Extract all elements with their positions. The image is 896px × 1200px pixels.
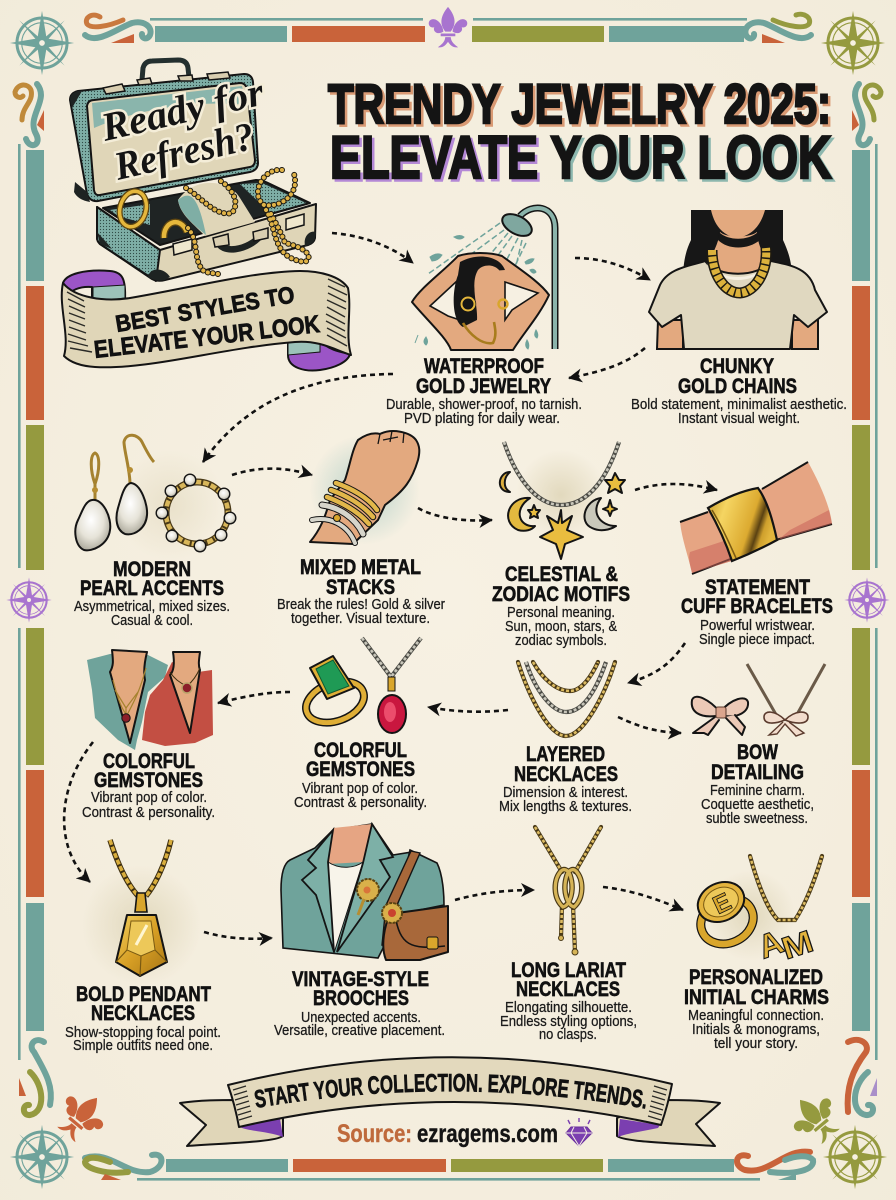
description: Initials & monograms, <box>692 1021 820 1038</box>
lid corners and hinges <box>70 91 90 202</box>
bag <box>383 906 448 960</box>
heading: MODERN <box>113 558 191 581</box>
red garment skin <box>170 652 200 733</box>
heading <box>681 576 833 618</box>
heading: MIXED METAL <box>300 556 421 579</box>
illustration: arm with cuff <box>680 462 832 574</box>
right purple roll <box>288 340 350 370</box>
suitcase corners <box>97 232 316 281</box>
arms <box>657 320 818 349</box>
scroll: top left vertical <box>15 84 44 145</box>
arm openings <box>430 280 538 320</box>
pendant <box>116 915 167 976</box>
scroll: bottom left horizontal <box>85 1155 162 1180</box>
spray lines <box>428 223 526 274</box>
description: Mix lengths & textures. <box>499 798 632 815</box>
arrow: waterproof to chunky <box>575 258 650 280</box>
description: Elongating silhouette. <box>505 999 632 1016</box>
shower pipe and head <box>520 208 555 349</box>
illustration: open suitcase <box>70 60 316 281</box>
item: long lariat necklaces <box>500 827 637 1043</box>
description <box>701 782 814 827</box>
icon: fleur-de-lis bottom left <box>49 1083 114 1149</box>
description <box>82 789 215 821</box>
far shoulder <box>395 850 444 915</box>
skin <box>328 824 372 864</box>
item: colorful gemstones worn <box>82 650 215 821</box>
illustration: two women with gem necklaces <box>87 650 213 750</box>
arrows: flow between trends <box>64 233 717 939</box>
heading <box>80 558 224 600</box>
item: waterproof gold jewelry <box>386 208 582 427</box>
teal garment <box>87 652 168 750</box>
description: Versatile, creative placement. <box>274 1022 445 1039</box>
left border rule and bars <box>18 144 44 1060</box>
script text: Ready for Refresh? <box>96 69 268 189</box>
arrow: layered to gemstones <box>428 707 508 712</box>
arrow: brooch to lariat <box>455 890 534 900</box>
teal garment necklaces <box>113 668 146 715</box>
right border rule and bars <box>852 144 878 1060</box>
chunky chain <box>712 248 766 293</box>
hair <box>454 256 505 327</box>
item: mixed metal stacks <box>277 431 445 627</box>
glow <box>115 450 225 560</box>
illustration: t-shirt with chain <box>649 210 827 349</box>
description <box>631 396 847 427</box>
description: Endless styling options, <box>500 1013 637 1030</box>
description <box>277 596 445 627</box>
icon: compass bottom right <box>823 1125 887 1189</box>
red garment pendant <box>170 668 200 686</box>
item: chunky gold chains <box>631 210 847 427</box>
lid teal shading <box>92 86 246 128</box>
heading: COLORFUL <box>103 750 195 773</box>
heading <box>511 959 626 1001</box>
description: Durable, shower-proof, no tarnish. <box>386 396 582 413</box>
heading <box>300 556 421 599</box>
heading <box>711 741 804 784</box>
arrow: waterproof to pearl <box>203 374 393 462</box>
icon: compass left middle <box>6 577 52 623</box>
heading <box>306 739 415 781</box>
description: Instant visual weight. <box>678 410 800 427</box>
top border rule and bars <box>150 18 747 42</box>
heading: BOW <box>737 741 778 764</box>
description: Meaningful connection. <box>688 1007 824 1024</box>
script text: Ready for Refresh?: Ready for <box>96 69 268 150</box>
illustration: emerald ring and ruby pendant <box>300 638 421 733</box>
initial M: M <box>777 923 817 966</box>
illustration: gold pendant <box>82 840 202 985</box>
title <box>328 72 834 194</box>
scroll: top left horizontal <box>85 15 151 43</box>
arrow: celestial to cuff <box>635 484 717 490</box>
illustration: pearl earrings and bracelet <box>75 435 236 560</box>
hair <box>683 210 792 280</box>
big star <box>540 510 583 559</box>
left purple roll <box>63 271 125 300</box>
description: Bold statement, minimalist aesthetic. <box>631 396 847 413</box>
glow <box>310 435 420 545</box>
small bow <box>764 712 808 723</box>
item: personalized initial charms <box>684 856 829 1052</box>
description <box>500 999 637 1043</box>
face and neck <box>474 266 503 326</box>
heading: CUFF BRACELETS <box>681 595 833 618</box>
teal garment skin <box>110 650 147 743</box>
ribbon left tail <box>180 1100 283 1146</box>
heading <box>416 355 551 398</box>
illustration: signet ring and initial necklace <box>691 856 822 966</box>
description: together. Visual texture. <box>291 610 430 627</box>
heading: WATERPROOF <box>424 355 544 378</box>
description: Coquette aesthetic, <box>701 796 814 813</box>
emerald <box>310 656 354 699</box>
ribbon banner: call to action <box>179 1056 721 1147</box>
description: Single piece impact. <box>699 631 815 648</box>
source label: Source: <box>337 1120 412 1148</box>
item: modern pearl accents <box>74 435 236 629</box>
heading: STACKS <box>326 576 395 599</box>
ribbon body <box>62 271 351 367</box>
heading: PERSONALIZED <box>689 966 823 989</box>
heading <box>492 563 630 606</box>
icon: fleur-de-lis top <box>429 7 467 47</box>
shirt <box>649 261 827 349</box>
arrow: pendant to brooch <box>204 932 272 939</box>
icon: fleur-de-lis bottom right <box>783 1085 848 1151</box>
description: Sun, moon, stars, & <box>505 618 617 635</box>
signet letter E: E <box>709 887 736 920</box>
heading: GEMSTONES <box>306 758 415 781</box>
arrow: suitcase to waterproof <box>332 233 413 263</box>
ribbon text: START YOUR COLLECTION. EXPLORE TRENDS. <box>254 1074 646 1109</box>
title line 2 ELEVATE: ELEVATE <box>330 124 538 191</box>
water drops <box>415 236 538 349</box>
suitcase handle <box>142 60 189 80</box>
description: Show-stopping focal point. <box>65 1024 221 1041</box>
description: Vibrant pop of color. <box>91 789 207 806</box>
illustration: blazer with brooches and bag <box>281 824 448 960</box>
gold rings <box>116 188 150 230</box>
ribbon hatching <box>233 1086 667 1120</box>
description: PVD plating for daily wear. <box>404 410 560 427</box>
item: bold pendant necklaces <box>65 840 221 1054</box>
blazer <box>281 824 412 958</box>
scroll: top right vertical <box>852 84 881 145</box>
body and arms <box>412 253 549 350</box>
title line 2 shadow ELEVATE: ELEVATE <box>332 126 540 194</box>
script text: Ready for Refresh?: Refresh? <box>109 113 258 189</box>
description <box>65 1024 221 1054</box>
icon: compass bottom left <box>10 1125 74 1189</box>
necklace <box>463 322 495 343</box>
large bow <box>692 697 748 716</box>
ribbon text line 1: BEST STYLES TO <box>114 281 296 337</box>
arrow: chunky to waterproof caption <box>569 348 645 378</box>
description: zodiac symbols. <box>515 632 607 649</box>
description <box>688 1007 824 1052</box>
description: Personal meaning. <box>507 604 615 621</box>
ribbon body <box>228 1057 672 1127</box>
arrow: layered to bow <box>618 717 681 733</box>
heading: BOLD PENDANT <box>76 983 211 1006</box>
scroll: bottom right horizontal <box>737 1152 813 1180</box>
suitcase front handle and clasps <box>218 234 262 249</box>
arrow: lariat to initial charms <box>603 887 683 910</box>
arm <box>680 462 832 573</box>
cuff <box>708 488 777 561</box>
icon: compass top left <box>10 11 74 75</box>
bangles <box>312 483 377 543</box>
heading: DETAILING <box>711 761 804 784</box>
ribbon right tail <box>617 1100 720 1146</box>
item: statement cuff bracelets <box>680 462 833 648</box>
icon: compass right middle <box>844 577 890 623</box>
description <box>274 1009 445 1039</box>
brooch on bag <box>382 903 402 923</box>
illustration: shower <box>412 208 555 350</box>
heading: LAYERED <box>526 743 605 766</box>
arrow: mixed metal to celestial <box>418 508 492 520</box>
heading: STATEMENT <box>705 576 810 599</box>
hand and arm <box>310 431 419 544</box>
item: bow detailing <box>692 664 825 827</box>
ribbon banner: best styles <box>62 271 351 370</box>
large gold moon <box>508 498 535 531</box>
heading <box>94 750 203 792</box>
scroll: bottom left vertical <box>19 1040 51 1115</box>
heading: PEARL ACCENTS <box>80 577 224 600</box>
heading <box>684 966 829 1009</box>
illustration: bows <box>692 664 825 736</box>
illustration: wrist with bangles <box>310 431 420 545</box>
neck and chin <box>711 210 765 238</box>
earrings <box>462 298 474 310</box>
source url: ezragems.com <box>417 1120 558 1148</box>
description: Feminine charm. <box>710 782 805 799</box>
necklace chain <box>750 856 822 920</box>
illustration: celestial necklace <box>500 442 625 559</box>
pearl bracelet <box>166 482 228 544</box>
red garment <box>142 662 213 746</box>
description: Contrast & personality. <box>294 794 427 811</box>
suitcase interior <box>103 180 310 245</box>
description <box>74 598 230 629</box>
heading: GOLD JEWELRY <box>416 375 551 398</box>
description <box>499 784 632 815</box>
item: vintage-style brooches <box>274 824 448 1039</box>
left lapel <box>302 830 334 952</box>
pendant bail <box>388 677 395 691</box>
description: Contrast & personality. <box>82 804 215 821</box>
heading <box>678 355 797 398</box>
arrow: gemstones to gemstone wearers <box>218 692 290 703</box>
small stars <box>528 473 625 518</box>
ring band <box>300 674 370 730</box>
ring band <box>693 890 761 952</box>
arrow: pearl to mixed metal <box>232 469 312 475</box>
description: Dimension & interest. <box>503 784 628 801</box>
heading <box>514 743 618 786</box>
heading: NECKLACES <box>514 763 618 786</box>
gold chains <box>186 180 235 214</box>
glow <box>82 865 202 985</box>
illustration: three chains <box>518 662 615 736</box>
initial A: A <box>753 923 788 966</box>
bag strap <box>382 851 420 945</box>
bottom border rule and bars <box>137 1159 760 1181</box>
heading: BROOCHES <box>313 987 409 1010</box>
item: layered necklaces <box>499 662 632 815</box>
suitcase lid <box>70 74 258 201</box>
right lapel <box>337 824 393 952</box>
description: Powerful wristwear. <box>700 617 815 634</box>
heading: INITIAL CHARMS <box>684 986 829 1009</box>
suitcase base <box>97 204 316 281</box>
heading: GEMSTONES <box>94 769 203 792</box>
description: Asymmetrical, mixed sizes. <box>74 598 230 615</box>
icon: diamond <box>566 1118 592 1146</box>
heading: NECKLACES <box>516 978 620 1001</box>
earring 1 <box>91 453 99 500</box>
pendant chain <box>362 638 421 677</box>
glow <box>705 870 795 960</box>
small moon <box>500 472 510 492</box>
description: subtle sweetness. <box>706 810 808 827</box>
glow <box>516 450 606 540</box>
ribbon text line 2: ELEVATE YOUR LOOK <box>93 311 321 364</box>
heading: NECKLACES <box>91 1002 195 1025</box>
chain <box>110 840 171 896</box>
source line <box>337 1118 592 1148</box>
heading <box>292 968 429 1010</box>
white tee <box>328 862 363 953</box>
description: Vibrant pop of color. <box>302 780 418 797</box>
heading: LONG LARIAT <box>511 959 626 982</box>
item: colorful gemstones jewelry <box>294 638 427 811</box>
heading: ZODIAC MOTIFS <box>492 583 630 606</box>
description <box>505 604 617 649</box>
ribbon purple folds <box>240 1119 660 1137</box>
description: Simple outfits need one. <box>73 1037 213 1054</box>
earring 2 <box>124 435 154 484</box>
ruby <box>378 695 406 733</box>
icon: compass top right <box>821 11 885 75</box>
description: Break the rules! Gold & silver <box>277 596 445 613</box>
heading: CHUNKY <box>700 355 774 378</box>
item: celestial and zodiac motifs <box>492 442 630 649</box>
description: tell your story. <box>714 1035 798 1052</box>
scroll: top right horizontal <box>745 14 811 43</box>
description: Unexpected accents. <box>301 1009 421 1026</box>
brooch flower <box>357 879 379 901</box>
heading: VINTAGE-STYLE <box>292 968 429 991</box>
suitcase pillow <box>178 183 255 236</box>
description <box>699 617 815 648</box>
description: no clasps. <box>539 1026 597 1043</box>
lid panel <box>87 83 255 195</box>
arrow: cuff to layered <box>628 643 685 683</box>
scroll: bottom right vertical <box>848 1040 877 1115</box>
heading <box>76 983 211 1025</box>
bail <box>135 893 147 912</box>
arrow: gemstone wearers to pendant <box>64 742 93 882</box>
signet face <box>691 875 751 929</box>
description <box>294 780 427 811</box>
description: Casual & cool. <box>111 612 193 629</box>
chain <box>504 442 619 505</box>
heading: GOLD CHAINS <box>678 375 797 398</box>
illustration: lariat knot <box>535 827 601 955</box>
heading: CELESTIAL & <box>505 563 618 586</box>
description <box>386 396 582 427</box>
ribbon hatching <box>67 279 347 352</box>
bow necklace chain <box>747 664 825 718</box>
silver moon <box>584 498 616 530</box>
heading: COLORFUL <box>314 739 407 762</box>
